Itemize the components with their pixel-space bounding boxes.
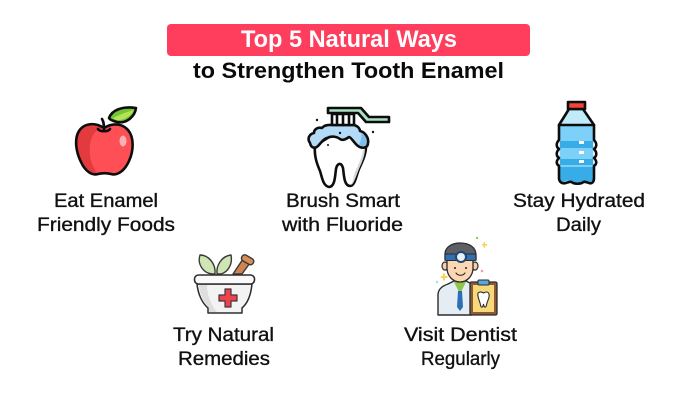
panel: visit dentist regularly [404,237,518,370]
panel: stay hydrated daily [513,102,645,236]
label: try natural remedies: Remedies [178,349,270,370]
label: eat enamel friendly foods: Eat Enamel [54,191,158,212]
title banner [167,24,530,56]
title line 1: Top 5 Natural Ways [241,26,457,53]
icon: tooth and toothbrush [309,108,389,187]
label: stay hydrated daily: Daily [556,215,602,236]
panel: try natural remedies [173,254,274,370]
title line 2: to Strengthen Tooth Enamel [193,58,504,83]
label: visit dentist regularly [404,325,518,370]
label: visit dentist regularly: Regularly [421,349,500,370]
label: stay hydrated daily: Stay Hydrated [513,191,645,212]
label: try natural remedies: Try Natural [173,325,274,346]
panel: eat enamel friendly foods [37,107,175,236]
label: brush smart with fluoride [281,191,403,236]
label: eat enamel friendly foods: Friendly Foods [37,215,175,236]
icon: dentist with clipboard [436,237,497,315]
icon: water bottle [557,102,596,184]
label: try natural remedies [173,325,274,370]
label: brush smart with fluoride: Brush Smart [286,191,401,212]
icon: apple [76,107,136,174]
label: eat enamel friendly foods [37,191,175,236]
title [167,24,530,83]
panel: brush smart with fluoride [281,108,403,236]
label: brush smart with fluoride: with Fluoride [281,215,403,236]
label: stay hydrated daily [513,191,645,236]
icon: mortar and pestle [194,254,255,313]
label: visit dentist regularly: Visit Dentist [404,325,518,346]
